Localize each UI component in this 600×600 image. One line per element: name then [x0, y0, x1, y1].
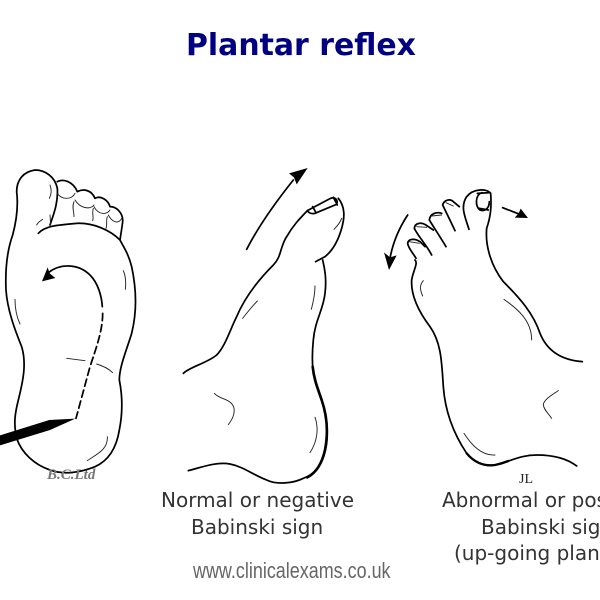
foot: normal plantar flexion [183, 168, 344, 483]
website credit: www.clinicalexams.co.uk [193, 558, 391, 583]
arrow: toes fan out [384, 215, 408, 270]
caption: normal: Normal or negative [161, 488, 354, 512]
signature: JL: JL [519, 472, 533, 487]
signature: B.C.Ltd: B.C.Ltd [46, 467, 96, 483]
foot: sole with stroke path [0, 170, 135, 473]
caption: normal [161, 488, 354, 538]
title: Plantar reflex [186, 28, 416, 63]
arrow: toe moves downward [247, 168, 308, 249]
arrow: stroke direction dashed curve [42, 266, 103, 418]
caption: normal: Babinski sign [191, 514, 323, 538]
caption: abnormal [442, 488, 600, 565]
foot: abnormal up-going plantar [384, 190, 582, 466]
icon: reflex hammer handle [0, 419, 75, 445]
arrow: big toe extends outward [503, 208, 528, 218]
